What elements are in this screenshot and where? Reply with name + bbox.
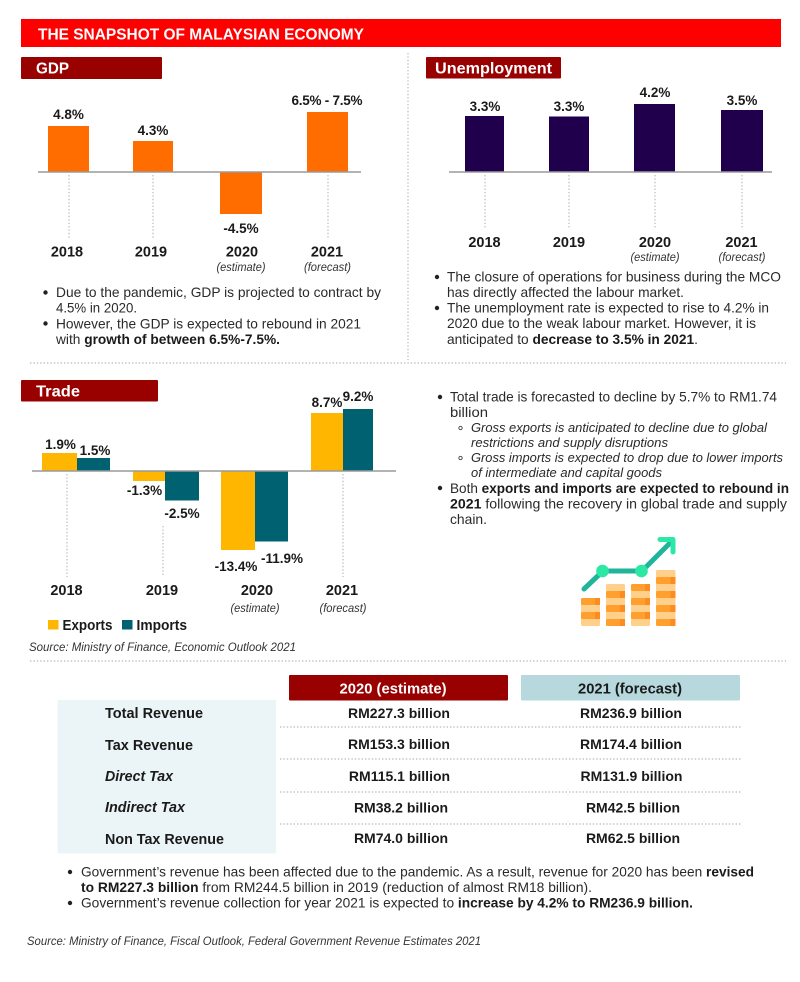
Trade bar chart: 9.2% bbox=[343, 389, 373, 404]
revenue commentary bbox=[68, 864, 754, 910]
row: Tax Revenue: Tax Revenue bbox=[105, 738, 193, 754]
GDP bar chart bbox=[38, 93, 362, 274]
Unemployment bar chart: 4.2% bbox=[640, 85, 670, 100]
GDP bar chart: 2021 bbox=[311, 244, 343, 260]
Trade commentary: Total trade is forecasted to decline by 5.7% to RM1.74 bbox=[450, 388, 777, 404]
Trade bar chart: 8.7% bbox=[312, 395, 342, 410]
row: Total Revenue bbox=[105, 705, 682, 722]
Trade source note: Source: Ministry of Finance, Economic Outlook 2021 bbox=[29, 640, 296, 654]
Unemployment bar chart: 2020 bbox=[639, 235, 671, 251]
row: Direct Tax bbox=[105, 768, 682, 785]
Unemployment commentary: The closure of operations for business during the MCO bbox=[447, 268, 781, 284]
GDP bar chart: -4.5% bbox=[223, 221, 259, 236]
Trade legend: Imports bbox=[136, 618, 187, 634]
GDP bar chart: 2018 bbox=[51, 244, 83, 260]
Trade bar chart: 1.9% bbox=[45, 437, 76, 452]
Trade bar chart: -11.9% bbox=[261, 551, 303, 566]
icon: coin stacks with rising arrow bbox=[581, 540, 676, 626]
revenue source note: Source: Ministry of Finance, Fiscal Outlook, Federal Government Revenue Estimates 2021 bbox=[27, 934, 481, 948]
Trade bar chart: -2.5% bbox=[164, 506, 200, 521]
row: Indirect Tax: RM38.2 billion bbox=[354, 800, 448, 816]
row: Indirect Tax: Indirect Tax bbox=[105, 800, 186, 816]
row: Non Tax Revenue bbox=[105, 830, 680, 848]
Unemployment bar chart: (estimate) bbox=[630, 252, 680, 264]
row: Total Revenue: RM236.9 billion bbox=[580, 705, 682, 721]
row: Direct Tax: RM131.9 billion bbox=[581, 768, 682, 784]
row: Indirect Tax: RM42.5 billion bbox=[586, 800, 680, 816]
Unemployment commentary: The unemployment rate is expected to rise to 4.2% in bbox=[447, 300, 769, 316]
title banner bbox=[21, 19, 781, 47]
row: Direct Tax: RM115.1 billion bbox=[349, 768, 450, 784]
Trade legend: Exports bbox=[62, 618, 112, 634]
revenue commentary: Government’s revenue collection for year 2021 is expected to increase by 4.2% to RM236.9 billion. bbox=[81, 894, 693, 910]
row label background bbox=[58, 700, 276, 854]
GDP bar chart: 4.8% bbox=[53, 107, 84, 122]
Trade commentary: of intermediate and capital goods bbox=[471, 465, 662, 480]
Unemployment commentary: 2020 due to the weak labour market. However, it is bbox=[447, 315, 756, 331]
Unemployment commentary: has directly affected the labour market. bbox=[447, 284, 684, 300]
Unemployment bar chart bbox=[449, 85, 772, 264]
row: Non Tax Revenue: RM62.5 billion bbox=[586, 830, 680, 846]
title banner: THE SNAPSHOT OF MALAYSIAN ECONOMY bbox=[38, 26, 364, 44]
row: Non Tax Revenue: Non Tax Revenue bbox=[105, 832, 224, 848]
Unemployment bar chart: 3.3% bbox=[470, 99, 500, 114]
Trade legend bbox=[48, 618, 187, 634]
row: Tax Revenue: RM153.3 billion bbox=[348, 736, 450, 752]
panel: Unemployment bbox=[426, 57, 781, 347]
Trade bar chart: 1.5% bbox=[80, 443, 110, 458]
row: Total Revenue: RM227.3 billion bbox=[348, 705, 450, 721]
Unemployment bar chart: (forecast) bbox=[718, 252, 766, 264]
row: Tax Revenue: RM174.4 billion bbox=[580, 736, 682, 752]
Unemployment bar chart: 2019 bbox=[553, 235, 585, 251]
Unemployment commentary bbox=[435, 268, 781, 347]
column header: 2021 forecast bbox=[521, 675, 740, 700]
column header: 2020 estimate bbox=[289, 675, 508, 700]
Unemployment heading bbox=[426, 57, 561, 78]
Unemployment bar chart: 2018 bbox=[468, 235, 501, 251]
GDP bar chart: 4.3% bbox=[138, 123, 168, 138]
GDP heading: GDP bbox=[36, 60, 69, 78]
Trade bar chart bbox=[32, 389, 396, 615]
GDP bar chart: 2020 bbox=[226, 244, 258, 260]
Trade commentary: Gross imports is expected to drop due to lower imports bbox=[471, 450, 783, 465]
Trade bar chart: 2021 bbox=[326, 583, 358, 599]
panel: Trade bbox=[21, 380, 789, 654]
Trade bar chart: -1.3% bbox=[127, 483, 162, 498]
Unemployment commentary: anticipated to decrease to 3.5% in 2021. bbox=[447, 331, 698, 347]
Trade heading bbox=[21, 380, 158, 402]
GDP commentary: However, the GDP is expected to rebound in 2021 bbox=[56, 316, 361, 332]
revenue commentary: to RM227.3 billion from RM244.5 billion in 2019 (reduction of almost RM18 billion). bbox=[81, 879, 592, 895]
Trade commentary: Both exports and imports are expected to rebound in bbox=[450, 480, 789, 496]
row: Tax Revenue bbox=[105, 736, 682, 754]
Trade commentary: 2021 following the recovery in global trade and supply bbox=[450, 496, 787, 512]
column header: 2020 estimate: 2020 (estimate) bbox=[340, 682, 447, 698]
Trade heading: Trade bbox=[36, 384, 80, 400]
GDP bar chart: (forecast) bbox=[304, 262, 351, 274]
Trade bar chart: (estimate) bbox=[230, 603, 280, 615]
Trade commentary: chain. bbox=[450, 511, 487, 527]
GDP commentary bbox=[43, 284, 381, 347]
Trade bar chart: (forecast) bbox=[320, 603, 367, 615]
column header: 2021 forecast: 2021 (forecast) bbox=[578, 682, 682, 698]
Trade commentary: billion bbox=[450, 404, 488, 420]
Unemployment bar chart: 3.3% bbox=[554, 99, 584, 114]
GDP commentary: Due to the pandemic, GDP is projected to contract by bbox=[56, 284, 381, 300]
Trade bar chart: 2019 bbox=[146, 583, 178, 599]
panel: GDP bbox=[21, 57, 381, 347]
row: Indirect Tax bbox=[105, 800, 680, 816]
Trade bar chart: -13.4% bbox=[215, 559, 257, 574]
row: Total Revenue: Total Revenue bbox=[105, 706, 203, 722]
panel: government revenue table bbox=[58, 675, 742, 854]
row: Direct Tax: Direct Tax bbox=[105, 769, 174, 785]
Unemployment bar chart: 2021 bbox=[725, 235, 758, 251]
GDP bar chart: 2019 bbox=[135, 244, 167, 260]
revenue commentary: Government’s revenue has been affected due to the pandemic. As a result, revenue for 2020 has been revised bbox=[81, 864, 754, 880]
Trade commentary: restrictions and supply disruptions bbox=[471, 435, 668, 450]
GDP bar chart: (estimate) bbox=[216, 262, 266, 274]
Trade commentary: Gross exports is anticipated to decline due to global bbox=[471, 420, 768, 435]
Unemployment bar chart: 3.5% bbox=[727, 93, 757, 108]
Unemployment heading: Unemployment bbox=[435, 60, 553, 78]
GDP bar chart: 6.5% - 7.5% bbox=[292, 93, 362, 108]
GDP commentary: 4.5% in 2020. bbox=[56, 300, 137, 316]
row: Non Tax Revenue: RM74.0 billion bbox=[354, 830, 448, 846]
Trade bar chart: 2018 bbox=[50, 583, 83, 599]
GDP heading bbox=[21, 57, 162, 79]
Trade bar chart: 2020 bbox=[241, 583, 273, 599]
Trade commentary bbox=[438, 388, 789, 527]
GDP commentary: with growth of between 6.5%-7.5%. bbox=[55, 331, 280, 347]
